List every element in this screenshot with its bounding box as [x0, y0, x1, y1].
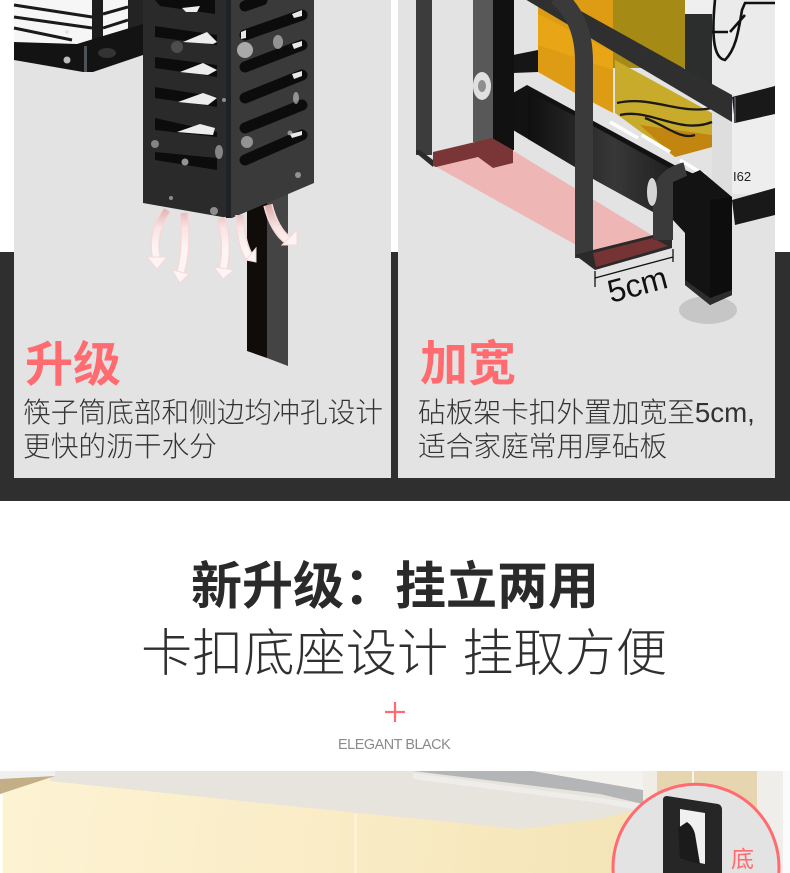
icon: chopstick holder body: [65, 0, 314, 218]
text: elegant black: ELEGANT BLACK: [338, 737, 451, 753]
icon: black hook plate: [663, 796, 722, 873]
icon: plus sign: [385, 702, 405, 722]
icon: front arch bracket: [557, 0, 686, 270]
right face slots: [245, 0, 302, 160]
subtitle: clip base design: 卡扣底座设计 挂取方便: [141, 625, 667, 682]
heading: widened: 加宽: [420, 338, 516, 391]
callout: base detail circle: [613, 784, 779, 873]
icon: oil bottles: [538, 0, 712, 157]
heading: upgrade: 升级: [25, 339, 121, 392]
icon: corner of wire shelf: [14, 0, 143, 72]
panel: perforated chopstick holder: [14, 0, 391, 478]
text: widened description: 砧板架卡扣外置加宽至5cm,: [418, 397, 755, 428]
text: base label: 底: [731, 846, 754, 872]
arrows: draining water: [147, 205, 297, 283]
title: new upgrade: 新升级：挂立两用: [191, 558, 599, 615]
dark band behind panels: [0, 252, 790, 501]
text: upgrade description: 筷子筒底部和侧边均冲孔设计: [23, 397, 383, 428]
photo: kitchen under-cabinet: [0, 771, 790, 873]
icon: rack rails: [513, 0, 775, 225]
panel: widened cutting board clip: [398, 0, 775, 478]
icon: floor shadows: [466, 161, 737, 324]
text: widened description: [418, 397, 755, 462]
icon: front leg: [673, 170, 732, 305]
icon: left mounting bracket: [416, 0, 514, 168]
text: widened description: 适合家庭常用厚砧板: [418, 431, 667, 462]
icon: pink width highlight: [433, 150, 668, 255]
dimension label: 5cm: 5cm: [603, 259, 671, 310]
left face slots: [155, 0, 217, 170]
icon: white bottle: I62: [733, 169, 751, 184]
icon: white bottle: [685, 0, 775, 195]
text: upgrade description: [23, 397, 383, 462]
water droplets: [65, 30, 301, 215]
icon: chopstick holder leg: [247, 190, 288, 366]
text: upgrade description: 更快的沥干水分: [23, 431, 217, 462]
